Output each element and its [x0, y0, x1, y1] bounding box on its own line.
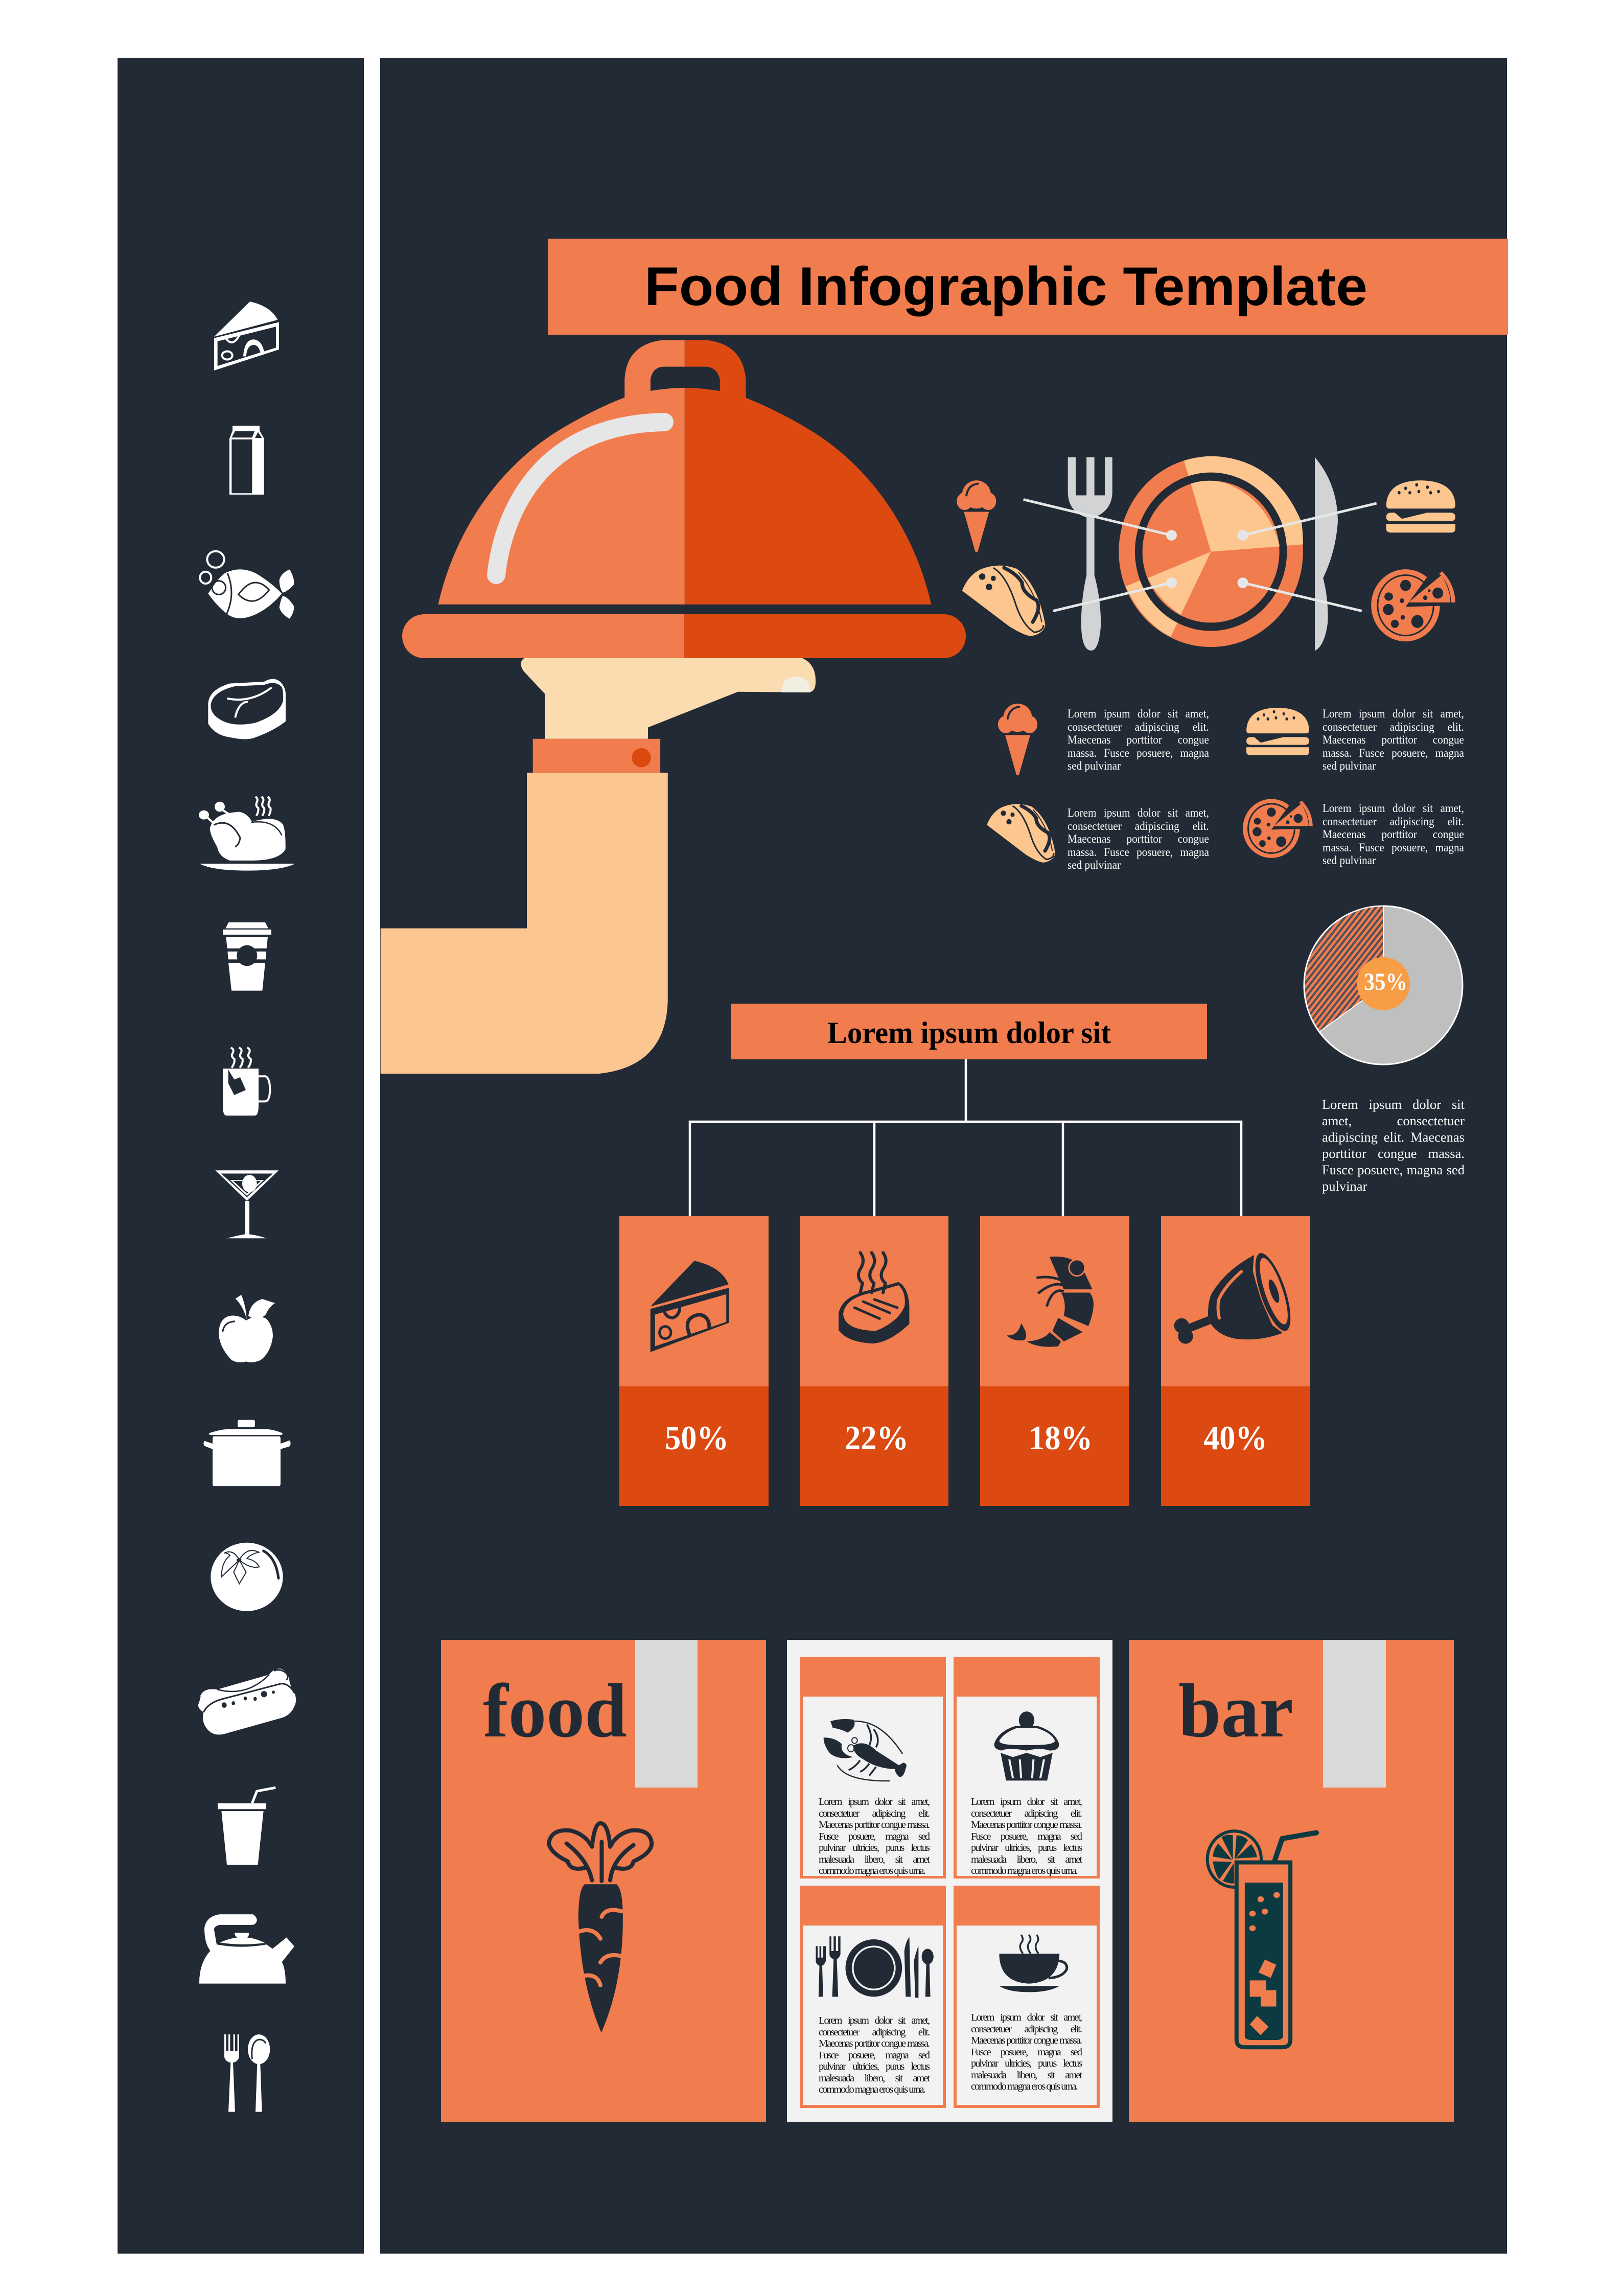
connector tree: [690, 1059, 1241, 1216]
card: ham 40%: [1161, 1216, 1310, 1506]
text: ice cream description: consectetuer adipiscing elit.: [1068, 721, 1209, 733]
text: place setting card: malesuada libero, sit amet: [819, 2073, 929, 2084]
grey tab: [1323, 1640, 1386, 1788]
menu card: cup: [954, 1886, 1100, 2108]
icon: tomato: [211, 1543, 283, 1611]
text: cupcake card: Fusce posuere, magna sed: [971, 1830, 1081, 1842]
icon: hot dog: [198, 1668, 296, 1735]
sidebar icons column three: [198, 1668, 296, 2112]
icon: pizza: [1371, 566, 1457, 641]
menu card: place setting: [800, 1886, 946, 2108]
text: cupcake card: [971, 1796, 1082, 1876]
text: ice cream description: [1068, 707, 1209, 772]
card: cheese 50%: [619, 1216, 769, 1506]
text: taco description: Lorem ipsum dolor sit amet,: [1068, 806, 1209, 819]
text: cupcake card: malesuada libero, sit amet: [971, 1854, 1081, 1865]
legend icon: taco: [987, 804, 1055, 863]
icon: milk carton: [229, 426, 264, 495]
icon: cooking pot: [203, 1420, 291, 1486]
bar panel: [1129, 1640, 1454, 2122]
sidebar icons column two: [203, 1048, 291, 1611]
icon: apple: [219, 1295, 275, 1362]
left sidebar panel: [118, 58, 364, 2254]
icon: cheese: [214, 302, 279, 370]
arm sleeve: [381, 773, 668, 1074]
sidebar icons column one: [199, 302, 295, 871]
text: burger description: massa. Fusce posuere, magna: [1323, 747, 1464, 759]
text: cup card: Lorem ipsum dolor sit amet,: [971, 2012, 1081, 2023]
grey tab: [635, 1640, 698, 1788]
icon: kettle: [199, 1914, 294, 1984]
icon: taco: [962, 566, 1046, 636]
text: lobster card: malesuada libero, sit amet: [819, 1854, 929, 1865]
icon: carrot: [549, 1823, 652, 2033]
text: pizza description: Maecenas porttitor congue: [1323, 828, 1464, 841]
text: pizza description: sed pulvinar: [1323, 854, 1376, 867]
text: pizza description: consectetuer adipiscing elit.: [1323, 815, 1464, 828]
subheading: Lorem ipsum dolor sit: [827, 1016, 1111, 1050]
icon: martini glass: [215, 1170, 279, 1238]
cuff with button: [533, 739, 660, 773]
cloche: [438, 340, 931, 605]
text: pie chart description: Lorem ipsum dolor sit: [1322, 1097, 1465, 1112]
place setting: [957, 456, 1457, 863]
text: taco description: consectetuer adipiscing elit.: [1068, 820, 1209, 832]
card: shrimp 18%: 18%: [1029, 1419, 1093, 1457]
text: lobster card: pulvinar ultricies, purus lectus: [819, 1842, 929, 1853]
card: ham 40%: 40%: [1203, 1419, 1267, 1457]
text: burger description: [1323, 707, 1464, 772]
legend icon: pizza: [1243, 797, 1314, 858]
food panel: [441, 1640, 766, 2122]
text: cupcake card: pulvinar ultricies, purus lectus: [971, 1842, 1081, 1853]
text: place setting card: [819, 2015, 930, 2095]
icon: takeaway coffee: [223, 922, 271, 991]
text: burger description: consectetuer adipiscing elit.: [1323, 721, 1464, 733]
text: cup card: Fusce posuere, magna sed: [971, 2046, 1081, 2057]
subheading box: [731, 1004, 1207, 1059]
icon: ice cream: [957, 480, 996, 552]
menu panel: [787, 1640, 1112, 2122]
legend icon: burger: [1246, 708, 1309, 755]
pie chart 35%: [1304, 906, 1463, 1064]
text: burger description: Maecenas porttitor congue: [1323, 733, 1464, 746]
text: pizza description: Lorem ipsum dolor sit amet,: [1323, 802, 1464, 815]
callout lines: [1024, 499, 1377, 611]
text: cupcake card: Lorem ipsum dolor sit amet,: [971, 1796, 1081, 1807]
text: pie chart description: Fusce posuere, magna sed: [1322, 1162, 1465, 1177]
text: cup card: pulvinar ultricies, purus lectus: [971, 2058, 1081, 2069]
icon: tea mug: [223, 1048, 270, 1116]
text: cup card: Maecenas porttitor congue massa.: [971, 2035, 1081, 2046]
card: cheese 50%: 50%: [665, 1419, 729, 1457]
plate pie chart: [1119, 456, 1303, 647]
text: pie chart description: porttitor congue massa.: [1322, 1146, 1465, 1161]
text: pie chart description: adipiscing elit. Maecenas: [1322, 1129, 1465, 1145]
icon: roast chicken: [199, 797, 295, 871]
text: pizza description: massa. Fusce posuere, magna: [1323, 841, 1464, 854]
text: lobster card: Maecenas porttitor congue massa.: [819, 1819, 929, 1830]
text: cup card: consectetuer adipiscing elit.: [971, 2024, 1081, 2035]
text: burger description: Lorem ipsum dolor sit amet,: [1323, 707, 1464, 720]
text: taco description: sed pulvinar: [1068, 859, 1121, 871]
text: taco description: Maecenas porttitor congue: [1068, 832, 1209, 845]
text: cup card: malesuada libero, sit amet: [971, 2070, 1081, 2081]
text: ice cream description: Lorem ipsum dolor sit amet,: [1068, 707, 1209, 720]
pie value: 35%: [1364, 968, 1407, 995]
text: taco description: massa. Fusce posuere, magna: [1068, 846, 1209, 859]
text: lobster card: commodo magna eros quis urna.: [819, 1865, 925, 1876]
text: place setting card: Maecenas porttitor congue massa.: [819, 2038, 929, 2049]
text: cup card: [971, 2012, 1082, 2092]
cloche right half: [685, 340, 931, 605]
knife: [1315, 457, 1338, 651]
fingernail: [782, 677, 810, 692]
main panel: [380, 58, 1507, 2254]
text: pie chart description: [1322, 1097, 1465, 1194]
text: pizza description: [1323, 802, 1464, 867]
text: ice cream description: massa. Fusce posuere, magna: [1068, 747, 1209, 759]
icon: fork and spoon: [224, 2034, 270, 2112]
cloche left half: [438, 340, 685, 605]
text: lobster card: [819, 1796, 930, 1876]
bar heading: bar: [1178, 1668, 1293, 1753]
text: burger description: sed pulvinar: [1323, 759, 1376, 772]
text: pie chart description: amet, consectetuer: [1322, 1113, 1465, 1128]
icon: steak: [208, 679, 286, 739]
menu card: lobster: [800, 1657, 946, 1878]
icon: fish: [200, 551, 294, 619]
text: ice cream description: sed pulvinar: [1068, 759, 1121, 772]
waiter arm and hand: [381, 658, 816, 1074]
serving tray: [402, 614, 966, 658]
title banner: [548, 239, 1508, 335]
text: lobster card: Lorem ipsum dolor sit amet,: [819, 1796, 929, 1807]
text: taco description: [1068, 806, 1209, 871]
text: pie chart description: pulvinar: [1322, 1178, 1367, 1194]
hand: [521, 658, 816, 739]
text: place setting card: Fusce posuere, magna sed: [819, 2049, 929, 2060]
cloche highlight: [496, 422, 664, 575]
text: ice cream description: Maecenas porttitor congue: [1068, 733, 1209, 746]
card: steak 22%: [800, 1216, 948, 1506]
food heading: food: [483, 1668, 627, 1753]
text: place setting card: pulvinar ultricies, purus lectus: [819, 2061, 929, 2072]
card: steak 22%: 22%: [845, 1419, 909, 1457]
icon: cocktail glass: [1208, 1831, 1316, 2047]
text: cupcake card: consectetuer adipiscing elit.: [971, 1808, 1081, 1819]
icon: drink cup: [218, 1788, 275, 1865]
percentage cards: [619, 1216, 1310, 1506]
text: cup card: commodo magna eros quis urna.: [971, 2081, 1077, 2092]
text: lobster card: Fusce posuere, magna sed: [819, 1830, 929, 1842]
text: place setting card: consectetuer adipiscing elit.: [819, 2027, 929, 2038]
fork: [1068, 457, 1112, 651]
text: place setting card: commodo magna eros quis urna.: [819, 2084, 925, 2095]
card: shrimp 18%: [980, 1216, 1129, 1506]
text: cupcake card: Maecenas porttitor congue massa.: [971, 1819, 1081, 1830]
text: lobster card: consectetuer adipiscing elit.: [819, 1808, 929, 1819]
title: Food Infographic Template: [644, 256, 1367, 317]
legend icon: ice cream: [998, 704, 1037, 775]
icon: burger: [1386, 480, 1455, 532]
text: place setting card: Lorem ipsum dolor sit amet,: [819, 2015, 929, 2026]
text: cupcake card: commodo magna eros quis urna.: [971, 1865, 1077, 1876]
menu card: cupcake: [954, 1657, 1100, 1878]
